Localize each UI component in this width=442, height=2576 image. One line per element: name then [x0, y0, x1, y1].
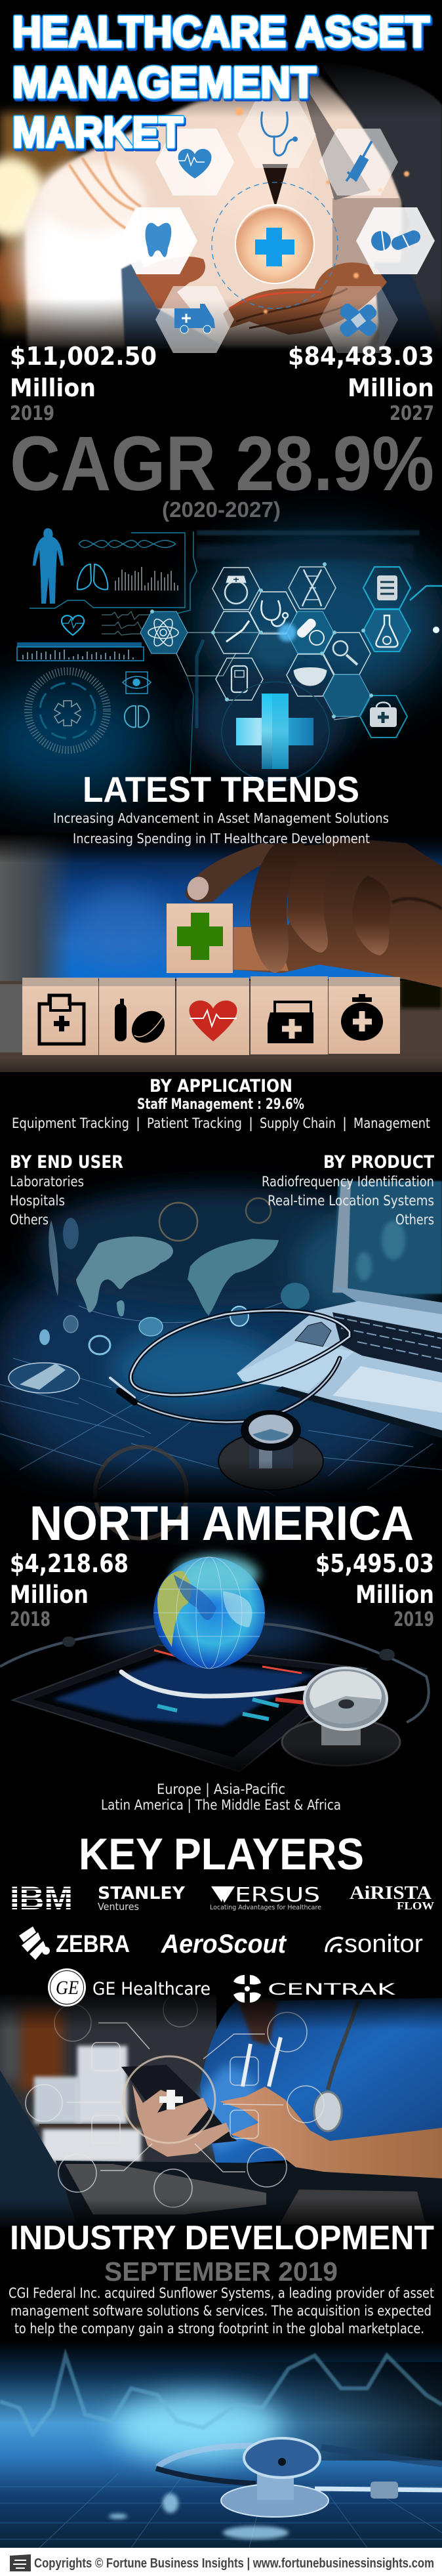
circuit floor lines	[0, 1358, 442, 1496]
icon: globe	[153, 1555, 265, 1669]
text block: by end user	[10, 1152, 123, 1228]
icon: bandage hexagon	[319, 286, 398, 353]
bottom fade	[0, 2198, 442, 2231]
application categories: Patient Tracking	[147, 1115, 242, 1131]
left hand	[132, 2085, 230, 2157]
title glow outline	[12, 7, 430, 156]
health line chart	[0, 2356, 442, 2434]
tablet ground fade	[0, 1745, 442, 1778]
logo: CenTrak	[233, 1975, 396, 2003]
laptop screen	[332, 1181, 442, 1294]
icon: nurse hexagon	[212, 568, 260, 610]
block: medical kit	[22, 978, 98, 1055]
icon: mask hexagon	[287, 654, 334, 696]
icon: DNA strand	[79, 541, 176, 547]
title glow outline: MANAGEMENT	[12, 58, 316, 106]
back of hand	[233, 837, 442, 987]
icon: large cyan cross	[222, 682, 329, 781]
logo: Sonitor: sonitor	[344, 1930, 423, 1958]
icon: glucose meter hexagon	[216, 658, 263, 700]
screen map shapes	[356, 1220, 405, 1281]
text block: other regions	[101, 1781, 341, 1814]
icon: eye box	[123, 672, 151, 694]
icon: ambulance hexagon	[155, 286, 234, 353]
readout bar	[17, 642, 144, 661]
title face: MARKET	[12, 108, 183, 156]
table fade	[0, 1058, 442, 1098]
laptop screen	[0, 2070, 93, 2228]
logo: CenTrak: CENTRAK	[268, 1980, 396, 1999]
title shadow layer	[14, 9, 431, 158]
text block: development details	[9, 2285, 434, 2337]
icon: syringe hexagon	[212, 612, 260, 654]
stat: 2018 regional value: Million	[10, 1581, 89, 1609]
blue blurred background	[0, 833, 442, 1056]
notebook	[279, 2190, 426, 2224]
middle finger	[250, 843, 305, 973]
title shadow layer: MARKET	[14, 110, 184, 158]
panel: clinician using phone with medical icons	[0, 1991, 442, 2231]
panel: medical technology network	[0, 528, 442, 800]
network connectors	[176, 633, 357, 774]
stat: 2019 market size	[10, 342, 157, 425]
icon: white cross on phone	[159, 2090, 183, 2109]
laptop base	[65, 2164, 266, 2214]
date: September 2019: SEPTEMBER 2019	[104, 2256, 338, 2287]
title glow outline: MARKET	[12, 108, 183, 156]
top fade	[0, 1991, 442, 2030]
block: round icon	[329, 977, 400, 1054]
index finger	[185, 843, 289, 903]
ECG lines	[102, 612, 150, 635]
text block: other regions: Europe | Asia-Pacific	[157, 1781, 285, 1798]
logo: IBM: IBM	[10, 1880, 73, 1917]
heading: north america: NORTH AMERICA	[30, 1496, 414, 1550]
ring finger	[287, 843, 344, 953]
footer strip	[0, 2548, 442, 2576]
extra hex outline right	[410, 586, 442, 600]
text block: trend lines	[53, 810, 389, 846]
darker right side	[216, 2362, 442, 2461]
application categories: |	[342, 1115, 347, 1132]
warm light behind coat	[0, 112, 79, 335]
icon: stethoscope	[156, 2438, 442, 2517]
block: red heart	[176, 978, 249, 1055]
panel left fade	[0, 1168, 39, 1273]
title face: MANAGEMENT	[12, 58, 316, 106]
dark jacket on right	[298, 60, 442, 348]
logo: Stanley Ventures: STANLEY	[98, 1884, 186, 1903]
icon: hand	[184, 837, 442, 987]
panel: globe on tablet with stethoscope	[0, 1555, 442, 1778]
stat: 2019 market size: 2019	[10, 402, 54, 425]
icon: syringe hexagon	[319, 129, 398, 196]
application categories: Supply Chain	[260, 1115, 336, 1131]
logo: AiRista Flow: FLOW	[397, 1900, 434, 1912]
node dots	[150, 562, 439, 718]
icon: DNA hexagon	[289, 567, 336, 609]
text block: by end user: BY END USER	[10, 1152, 123, 1173]
end user list: Others	[10, 1212, 49, 1228]
panel: world map, stethoscope and laptop	[0, 1132, 442, 1539]
row of wooden blocks	[22, 976, 400, 1055]
icon: brain	[125, 706, 149, 727]
icon: heart hexagon	[155, 129, 234, 196]
sparkles	[235, 108, 409, 314]
icon: small silver dome	[9, 1363, 79, 1393]
end user list: Hospitals	[10, 1193, 65, 1209]
blue scrubs	[197, 1998, 442, 2165]
panel top fade	[0, 1132, 442, 1178]
stat: 2018 regional value: 2018	[10, 1608, 50, 1631]
text block: trend lines: Increasing Advancement in Asset Management Solutions	[53, 810, 389, 826]
laptop	[237, 1181, 442, 1438]
icon: phone	[121, 2065, 237, 2144]
tablet	[12, 1645, 367, 1772]
stat: 2027 market size: Million	[348, 374, 434, 402]
icon: lower chest piece	[282, 1718, 400, 1766]
icon: flask hexagon	[363, 610, 411, 652]
laptop deck	[237, 1301, 442, 1430]
icon: magnifier hexagon	[323, 633, 371, 675]
white doctor coat	[20, 72, 401, 348]
heading: industry development: INDUSTRY DEVELOPMENT	[10, 2219, 434, 2257]
logo: GE Healthcare: GE Healthcare	[92, 1979, 211, 1999]
icon: tooth hexagon	[119, 207, 197, 274]
icon: chest piece	[218, 1410, 323, 1490]
cupped hands	[134, 257, 387, 335]
stat: 2018 regional value	[10, 1549, 129, 1631]
dashed ring	[212, 182, 338, 308]
logo: Versus: ERSUS	[235, 1884, 320, 1907]
index fingernail	[184, 874, 212, 903]
keyboard	[332, 1312, 442, 1373]
block: medical bag	[251, 976, 328, 1054]
icon: star of life gauge	[28, 671, 107, 750]
panel: hero photo of doctor holding medical icons	[0, 59, 442, 354]
icon: atom hexagon	[140, 612, 188, 654]
icon: earpiece	[295, 1322, 331, 1346]
end user list	[10, 1174, 84, 1228]
icon: stethoscope hexagon	[237, 101, 316, 168]
logo: AeroScout: AeroScout	[161, 1930, 287, 1959]
block: oxygen tank and pill	[99, 978, 175, 1055]
right hand and arm	[220, 2087, 442, 2178]
icon: first aid kit hexagon	[360, 696, 407, 737]
white bottles and shelf	[34, 2046, 144, 2162]
filled hexagon	[323, 675, 371, 717]
thumb	[233, 926, 289, 971]
trackpad	[332, 1366, 442, 1413]
title face	[12, 7, 430, 156]
icon: pill hexagon with flare	[278, 612, 334, 654]
icon: glass bubble with blue cross	[235, 205, 314, 283]
logo: Versus	[210, 1884, 321, 1911]
stat: 2019 market size: Million	[10, 374, 96, 402]
icon: clipboard hexagon	[363, 567, 411, 609]
icon: Fortune Business Insights logo	[10, 2554, 31, 2571]
panel: hand stacking wooden medical blocks	[0, 833, 442, 1098]
globe rings and lens bubbles	[39, 1198, 310, 1354]
grid lines	[0, 2474, 442, 2548]
icon: lungs	[77, 564, 108, 589]
blue sleeve and cuffs	[121, 259, 442, 348]
navy map background	[0, 1188, 439, 1509]
heading: latest trends: LATEST TRENDS	[83, 769, 359, 810]
icon: stethoscope tubes	[110, 1310, 350, 1423]
stat: 2027 market size	[288, 342, 434, 425]
lower ring	[95, 1447, 187, 1539]
title	[12, 7, 431, 158]
stat: 2019 market size: $11,002.50	[10, 342, 157, 371]
application categories: |	[249, 1115, 253, 1132]
icon: upper chest piece	[304, 1668, 387, 1730]
logo: Stanley Ventures	[98, 1884, 186, 1913]
icon: human body	[33, 528, 64, 604]
blue gradient backdrop	[0, 2340, 442, 2548]
text block: other regions: Latin America | The Middle East & Africa	[101, 1797, 341, 1814]
footer	[0, 2548, 442, 2576]
title shadow layer: MANAGEMENT	[14, 60, 317, 108]
logo: GE Healthcare	[48, 1968, 211, 2006]
stat: 2019 regional value	[315, 1549, 434, 1631]
logo: Zebra: ZEBRA	[56, 1930, 130, 1957]
text block: by application	[12, 1076, 430, 1132]
bright cyan glow	[111, 2395, 282, 2461]
logo: Stanley Ventures: Ventures	[98, 1901, 139, 1913]
icon: pills hexagon	[356, 207, 435, 274]
product list: Others	[395, 1212, 434, 1228]
end user list: Laboratories	[10, 1174, 84, 1190]
body scan panel outline	[30, 531, 197, 613]
floor reflections	[109, 2493, 289, 2539]
product list	[262, 1174, 434, 1228]
icon: stethoscope on scrubs	[243, 2001, 358, 2131]
text block: by application: BY APPLICATION	[150, 1076, 292, 1096]
text block: trend lines: Increasing Spending in IT Healthcare Development	[73, 831, 370, 846]
logo: GE Healthcare: GE	[56, 1977, 79, 1999]
CAGR figure: (2020-2027)	[162, 497, 281, 522]
icon: heart rate	[62, 615, 84, 635]
logo: AiRista Flow	[350, 1883, 434, 1912]
application categories	[12, 1115, 430, 1132]
upper stethoscope tube	[0, 1614, 429, 1722]
text block: by application: Staff Management : 29.6%	[137, 1096, 304, 1113]
overlay icon rings	[26, 1993, 324, 2207]
icon: stethoscope tube	[121, 1672, 308, 1696]
icon: stethoscope hexagon	[250, 592, 297, 634]
bottom fade	[0, 299, 442, 354]
application categories: Management	[353, 1115, 430, 1131]
panel: blue stethoscope on data grid	[0, 2340, 442, 2548]
text block: by product	[262, 1152, 435, 1228]
logos: key players	[10, 1880, 434, 2006]
stat: 2018 regional value: $4,218.68	[10, 1549, 129, 1578]
logo: AiRista Flow: AiRISTA	[350, 1883, 432, 1903]
table	[0, 979, 442, 1072]
stat: 2027 market size: $84,483.03	[288, 342, 434, 371]
panel bottom fade	[0, 1460, 442, 1503]
dark clinic background	[0, 1995, 216, 2172]
icon: block with green cross	[167, 904, 233, 973]
little finger	[352, 876, 391, 955]
bar chart	[115, 567, 178, 591]
heading: key players: KEY PLAYERS	[79, 1829, 364, 1879]
logo: Zebra	[19, 1926, 130, 1960]
application categories: Equipment Tracking	[12, 1115, 129, 1131]
logo: Versus: Locating Advantages for Healthcare	[210, 1904, 321, 1911]
top fade	[0, 59, 442, 118]
world map continents	[49, 1220, 279, 1316]
table	[56, 2161, 442, 2231]
background glow	[0, 530, 442, 800]
application categories: |	[136, 1115, 140, 1132]
